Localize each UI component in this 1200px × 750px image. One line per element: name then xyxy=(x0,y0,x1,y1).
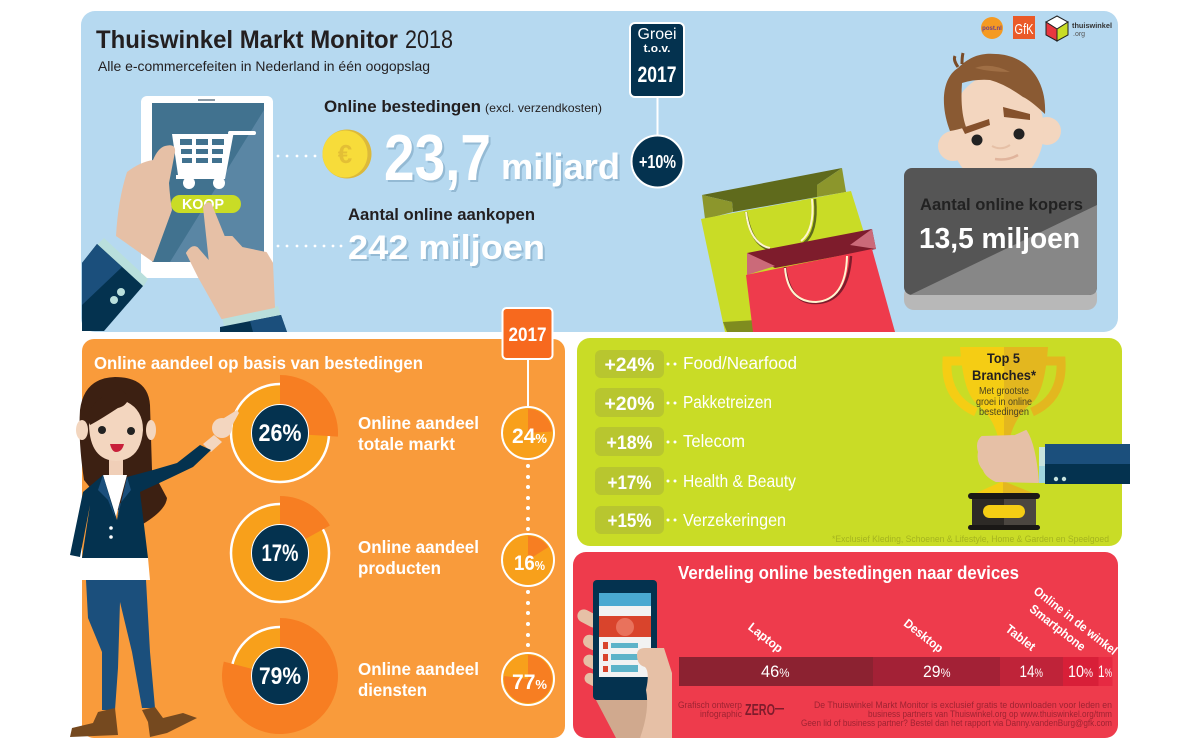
note: download information: Geen lid of business partner? Bestel dan het rapport via Danny.vandenBurg@gfk.com xyxy=(801,718,1112,729)
row: pakketreizen: +20% xyxy=(604,394,655,415)
segment: desktop 29 percent: 29% xyxy=(923,662,951,681)
row: food/nearfood: Food/Nearfood xyxy=(683,353,797,373)
label: online bestedingen: Online bestedingen xyxy=(324,97,481,116)
subtitle: Alle e-commercefeiten in Nederland in één oogopslag xyxy=(98,59,430,74)
icon: thumb and palm xyxy=(637,648,672,738)
icon: fingers xyxy=(575,607,603,688)
label: diensten: Online aandeel xyxy=(358,659,479,679)
badge: groei t.o.v. 2017: 2017 xyxy=(638,62,676,87)
axis labels: devices: Laptop xyxy=(745,620,786,656)
circle: +10% growth: +10% xyxy=(639,152,676,172)
note: download information xyxy=(801,700,1112,729)
credit: design: ZERO xyxy=(745,702,775,719)
footnote: *Exclusief Kleding, Schoenen & Lifestyle, Home & Garden en Speelgoed xyxy=(832,534,1109,545)
icon: green bag xyxy=(701,168,895,332)
circle: 16 percent 2017: 16% xyxy=(514,552,545,575)
title: Thuiswinkel Markt Monitor xyxy=(96,26,398,54)
label: producten: Online aandeel xyxy=(358,537,479,557)
segment: smartphone 10 percent: 10% xyxy=(1068,662,1093,681)
icon: sleeve xyxy=(1045,444,1130,484)
icon: hair xyxy=(80,377,167,524)
text: top 5 branches: groei in online xyxy=(976,397,1032,408)
button: koop xyxy=(171,195,241,213)
icon: hand holding phone xyxy=(575,580,672,738)
row: pakketreizen: Pakketreizen xyxy=(683,392,772,412)
logo: thuiswinkel cube: thuiswinkel xyxy=(1072,21,1112,30)
icon: jeans xyxy=(86,580,155,710)
icon: jacket buttons xyxy=(109,526,113,539)
icon: mouth xyxy=(995,155,1018,160)
label: producten xyxy=(358,537,479,578)
icon: hair tuft xyxy=(954,53,963,67)
axis labels: devices: Tablet xyxy=(1003,622,1039,654)
icon: right sleeve xyxy=(220,306,287,332)
icon: ears xyxy=(76,420,156,440)
circle: 77 percent 2017: 77% xyxy=(512,671,547,694)
row: telecom: +18% xyxy=(606,433,653,454)
segment: tablet 14 percent: 14% xyxy=(1020,662,1043,681)
icon: nose xyxy=(992,145,1010,148)
row: verzekeringen: +15% xyxy=(608,511,652,532)
icon: mouth xyxy=(110,444,124,452)
label: diensten xyxy=(358,659,479,700)
badge: groei t.o.v. 2017: Groei xyxy=(638,26,676,43)
icon: left boot xyxy=(70,708,118,737)
note: download information: business partners van Thuiswinkel.org op www.thuiswinkel.org/tmm xyxy=(868,709,1112,720)
icon: white top xyxy=(70,555,150,580)
icon: pedestal xyxy=(968,493,1040,530)
icon: euro coin xyxy=(322,130,372,178)
icon: shopping cart xyxy=(172,131,256,189)
icon: right hand pointing xyxy=(187,203,274,318)
icon: cuff xyxy=(1039,447,1045,483)
icon: red bag xyxy=(746,229,895,332)
value: 13,5 miljoen: 13,5 miljoen xyxy=(919,223,1080,255)
icon: shirt xyxy=(103,475,127,520)
segment: laptop 46 percent xyxy=(679,657,873,686)
row: telecom: Telecom xyxy=(683,431,745,451)
icon: eyes xyxy=(98,426,135,435)
donut: 79 percent xyxy=(222,618,338,734)
illustration: shopping bags xyxy=(701,168,895,332)
value: 242 miljoen: 242 miljoen xyxy=(348,229,545,267)
text: top 5 branches: Met grootste xyxy=(979,386,1029,397)
logo: thuiswinkel cube: .org xyxy=(1073,31,1085,38)
icon: handles xyxy=(947,361,1061,412)
icon: hair highlight xyxy=(975,66,1010,72)
badge: 2017: 2017 xyxy=(508,325,546,346)
panel: devices xyxy=(573,552,1120,738)
icon: left sleeve xyxy=(82,238,148,331)
icon: face xyxy=(950,74,1044,186)
icon: tablet held by hands with shopping cart xyxy=(82,96,287,332)
segment: smartphone 10 percent xyxy=(1063,657,1098,686)
axis labels: devices: Desktop xyxy=(901,616,946,656)
title: 2018 xyxy=(405,26,453,54)
panel: online spending overview xyxy=(81,11,1118,332)
circle: 77 percent 2017 xyxy=(502,653,554,705)
icon: eyebrows xyxy=(962,107,1030,134)
label: totale markt: Online aandeel xyxy=(358,413,479,433)
connector dots xyxy=(277,155,342,247)
text: aantal online kopers: Aantal online kopers xyxy=(920,195,1083,214)
heading: devices: Verdeling online bestedingen naar devices xyxy=(678,563,1019,583)
label: producten: producten xyxy=(358,558,441,578)
value: 23,7 miljard xyxy=(384,121,620,194)
donut: 17 percent xyxy=(231,496,330,602)
credit: design xyxy=(678,700,784,720)
credit: design: Grafisch ontwerp xyxy=(678,700,742,711)
text: top 5 branches xyxy=(972,350,1036,418)
icon: stem xyxy=(976,481,1033,493)
label: totale markt xyxy=(358,413,479,454)
text: top 5 branches: Top 5 xyxy=(987,350,1020,366)
icon: eyes xyxy=(972,128,1024,146)
label: diensten: diensten xyxy=(358,680,427,700)
segment: laptop 46 percent: 46% xyxy=(761,662,790,681)
logos xyxy=(981,16,1112,41)
icon: jacket xyxy=(70,445,211,558)
row: telecom xyxy=(595,427,745,456)
text: top 5 branches: bestedingen xyxy=(979,407,1029,418)
icon: trophy xyxy=(947,347,1130,530)
row: health & beauty: Health & Beauty xyxy=(683,471,796,491)
icon: fringe xyxy=(88,390,128,425)
value: 23,7 miljard: miljard xyxy=(501,146,620,187)
icon: lapels xyxy=(98,475,131,520)
icon: cup left half xyxy=(960,347,1004,437)
donut: 79 percent: 79% xyxy=(259,663,301,690)
axis labels: devices: Online in de winkel xyxy=(1031,584,1120,658)
icon: palm shadow xyxy=(596,700,660,738)
icon: phone xyxy=(593,580,657,700)
row: health & beauty: +17% xyxy=(608,473,652,494)
axis labels: devices xyxy=(745,584,1120,658)
panel: top 5 branches xyxy=(577,338,1130,546)
value: 23,7 miljard: 23,7 xyxy=(384,121,491,194)
segment: in store 1 percent: 1% xyxy=(1098,662,1112,681)
circle: +10% growth xyxy=(632,136,684,188)
segment: tablet 14 percent xyxy=(1000,657,1063,686)
row: verzekeringen xyxy=(595,506,786,534)
icon: face xyxy=(89,402,143,461)
icon: hair xyxy=(944,54,1045,131)
icon: hand pointing xyxy=(203,410,239,452)
button: koop: KOOP xyxy=(182,196,224,213)
icon: cup right half xyxy=(1004,347,1048,437)
credit: design: infographic xyxy=(700,709,742,720)
label: online bestedingen xyxy=(324,97,602,116)
circle: 16 percent 2017 xyxy=(502,534,554,586)
note: download information: De Thuiswinkel Markt Monitor is exclusief gratis te downloaden voor leden en xyxy=(814,700,1112,711)
donut: 17 percent: 17% xyxy=(262,540,298,567)
donut: 26 percent xyxy=(231,375,338,482)
icon: laptop screen xyxy=(904,168,1097,295)
badge: groei t.o.v. 2017: t.o.v. xyxy=(644,43,670,55)
panel: online share xyxy=(70,339,565,738)
badge: 2017 xyxy=(502,308,552,359)
logo: thuiswinkel cube xyxy=(1046,16,1112,41)
row: verzekeringen: Verzekeringen xyxy=(683,510,786,530)
connector dots xyxy=(526,464,530,647)
label: aantal online aankopen: Aantal online aankopen xyxy=(348,205,535,224)
text: top 5 branches: Branches* xyxy=(972,367,1036,383)
icon: ears xyxy=(938,117,1061,161)
heading: online aandeel: Online aandeel op basis van bestedingen xyxy=(94,353,423,373)
icon: euro coin: € xyxy=(338,139,352,169)
row: health & beauty xyxy=(595,467,796,495)
row: pakketreizen xyxy=(595,388,772,417)
logo: postnl: post.nl xyxy=(982,26,1002,32)
illustration: boy behind laptop xyxy=(904,53,1097,310)
row: food/nearfood: +24% xyxy=(604,355,655,376)
icon: hand holding trophy xyxy=(978,431,1038,482)
icon: right boot xyxy=(142,707,197,737)
label: online bestedingen: (excl. verzendkosten) xyxy=(485,101,602,115)
axis labels: devices: Smartphone xyxy=(1027,602,1088,654)
badge: groei t.o.v. 2017 xyxy=(630,23,684,136)
row: food/nearfood xyxy=(595,350,797,378)
icon: laptop base xyxy=(904,285,1097,310)
label: totale markt: totale markt xyxy=(358,434,455,454)
connector line xyxy=(527,358,529,406)
icon: left hand xyxy=(116,145,175,262)
logo: gfk: GfK xyxy=(1014,21,1034,38)
illustration: woman pointing xyxy=(70,377,239,737)
segment: desktop 29 percent xyxy=(873,657,1000,686)
icon: neck xyxy=(109,455,123,485)
donut: 26 percent: 26% xyxy=(258,420,302,447)
circle: 24 percent 2017: 24% xyxy=(512,425,547,448)
circle: 24 percent 2017 xyxy=(502,407,554,459)
bar chart: device share xyxy=(679,657,1112,686)
segment: in store 1 percent xyxy=(1098,657,1112,686)
